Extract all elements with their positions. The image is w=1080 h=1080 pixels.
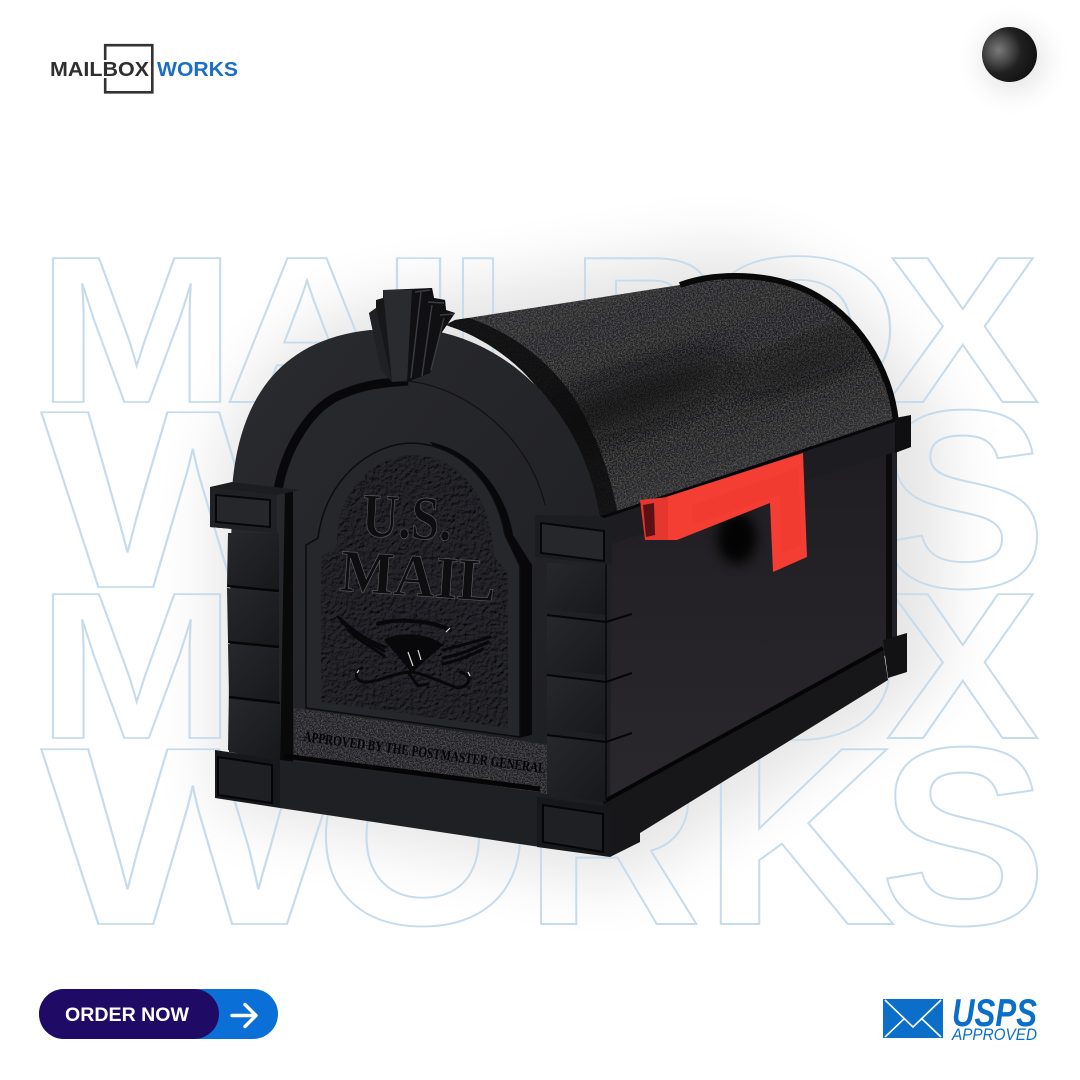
- mailbox arched plate with U.S. MAIL lettering: [306, 442, 532, 738]
- mailbox bottom side rail: [603, 633, 907, 857]
- outline word: WORKS (bottom): K: [703, 695, 896, 979]
- outline word: MAILBOX (lower): X: [886, 549, 1039, 783]
- outline word: MAILBOX (lower): I: [377, 549, 460, 783]
- mailbox base strip: [280, 756, 540, 847]
- outline word: MAILBOX (top): L: [449, 214, 577, 447]
- icon: envelope: [883, 999, 943, 1038]
- mailbox top rail and right post: [600, 415, 911, 546]
- background outlined wordmark: [37, 213, 1047, 979]
- outline word: MAILBOX (lower): O: [694, 549, 901, 783]
- logo: Mailbox Works: [50, 45, 238, 92]
- mailbox decorative finial: [369, 288, 455, 382]
- soft shadow behind mailbox: [215, 247, 945, 885]
- mailbox left pillar blocks: [227, 533, 280, 760]
- plate eagle highlights: [357, 628, 470, 676]
- mailbox flag shadow: [717, 512, 757, 564]
- mailbox product illustration: [210, 276, 911, 857]
- outline word: MAILBOX (top): A: [224, 213, 390, 447]
- mailbox right foot block: [537, 797, 610, 857]
- mailbox side panel: [600, 425, 897, 803]
- hammered plate surface: [321, 455, 508, 728]
- outline word: WORKS (upper): K: [703, 358, 896, 642]
- approved wordmark: APPROVED: [951, 1025, 1037, 1044]
- mailbox inscription: APPROVED BY THE POSTMASTER GENERAL: [302, 729, 547, 777]
- logo text WORKS: WORKS: [157, 59, 238, 81]
- outline word: WORKS (upper): W: [41, 358, 347, 641]
- mailbox red flag: [640, 453, 807, 572]
- plate frame: [306, 443, 520, 737]
- mailbox left capital block: [210, 482, 300, 533]
- outline word: WORKS (upper): S: [880, 358, 1047, 641]
- outline word: WORKS (bottom): R: [525, 694, 701, 978]
- outline word: WORKS (bottom): O: [314, 694, 532, 978]
- outline word: WORKS (bottom): [41, 694, 1047, 979]
- mailbox inscription: [294, 708, 547, 794]
- outline word: WORKS (upper): R: [525, 357, 701, 641]
- outline word: MAILBOX (lower): A: [224, 549, 390, 783]
- outline word: MAILBOX (lower): M: [37, 549, 236, 783]
- plate eagle emblem: [338, 617, 490, 688]
- outline word: WORKS (upper): O: [314, 357, 532, 641]
- outline word: MAILBOX (top): M: [37, 213, 236, 447]
- button blue backing: [39, 989, 278, 1039]
- outline word: MAILBOX (top): O: [694, 213, 901, 447]
- plate lettering MAIL: MAIL: [338, 538, 498, 614]
- outline word: MAILBOX (lower): B: [571, 549, 726, 782]
- usps wordmark: USPS: [952, 992, 1037, 1035]
- outline word: WORKS (upper): [41, 357, 1047, 642]
- outline word: MAILBOX (lower): [37, 549, 1039, 783]
- plate recess shadow: [430, 442, 532, 738]
- icon: arrow: [232, 1004, 256, 1026]
- outline word: MAILBOX (top): B: [571, 213, 726, 446]
- mailbox front arch face: [228, 330, 612, 810]
- usps approved badge: [883, 992, 1037, 1044]
- outline word: MAILBOX (top): [37, 213, 1039, 447]
- plate lettering U.S.: U.S.: [360, 482, 454, 554]
- outline word: MAILBOX (top): I: [377, 213, 460, 447]
- outline word: MAILBOX (top): X: [886, 213, 1039, 447]
- button navy pill: [39, 989, 219, 1039]
- mailbox right capital block: [535, 515, 612, 565]
- mailbox left foot block: [215, 750, 280, 808]
- mailbox domed roof: [445, 276, 898, 518]
- order now button: [39, 989, 278, 1039]
- logo text MAILBOX: MAILBOX: [50, 59, 150, 81]
- button label: ORDER NOW: [65, 1005, 189, 1026]
- logo square frame: [105, 45, 152, 92]
- outline word: WORKS (bottom): W: [41, 695, 347, 978]
- outline word: MAILBOX (lower): L: [449, 550, 577, 783]
- mailbox right pillar blocks: [547, 525, 632, 802]
- outline word: WORKS (bottom): S: [880, 695, 1047, 978]
- colour swatch: black sphere: [981, 27, 1045, 92]
